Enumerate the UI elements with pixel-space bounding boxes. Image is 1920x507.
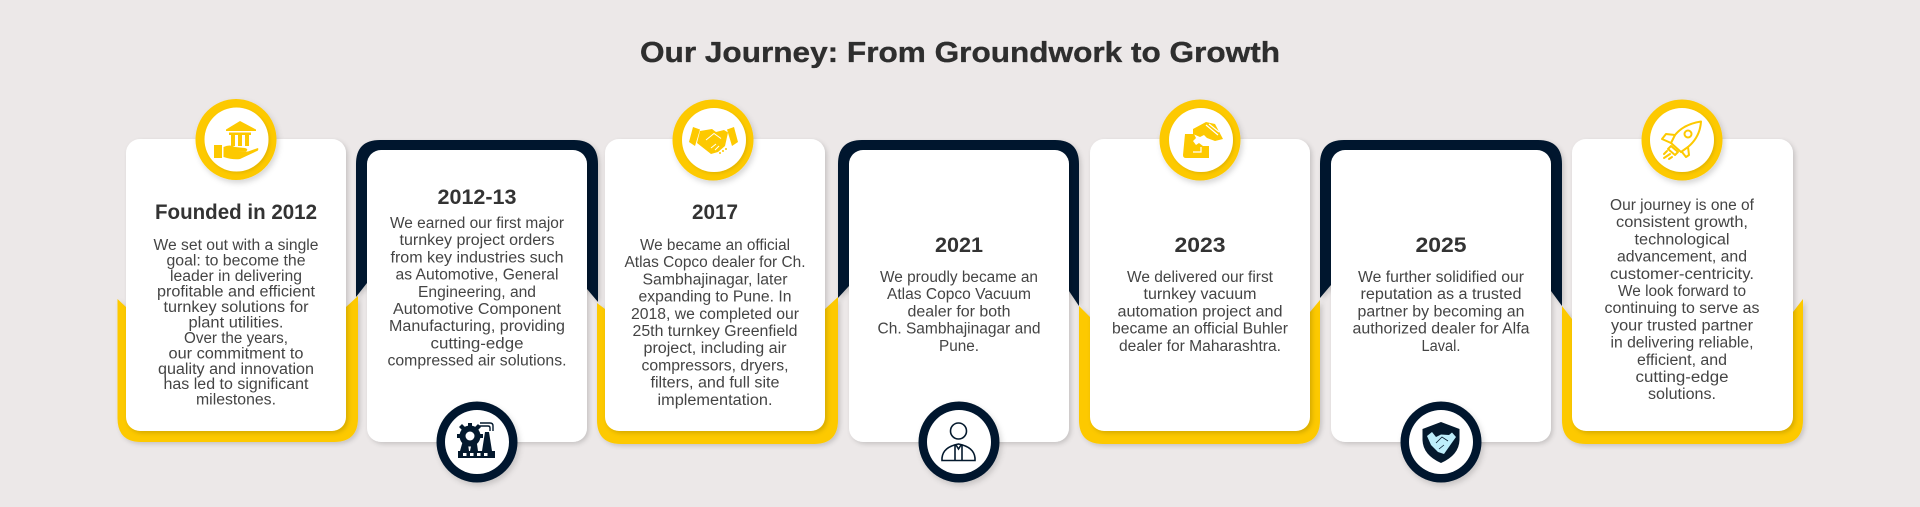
body text: efficient, and [1637,352,1727,369]
heading: 2023 [1174,234,1226,257]
body text: customer-centricity. [1610,266,1754,283]
body text [878,269,1040,355]
body text: has led to significant [164,376,309,393]
body text: We became an official [640,237,790,254]
body text: turnkey project orders [400,232,555,249]
body text: Automotive Component [393,301,562,318]
body text: quality and innovation [158,361,314,378]
icon: rocket [1642,100,1722,180]
body text: We earned our first major [390,215,564,232]
white card [1331,150,1551,442]
body text [154,237,318,409]
panel: 2021 [838,140,1079,482]
body text: dealer for Maharashtra. [1119,338,1281,355]
body text: compressed air solutions. [388,353,566,370]
body text: from key industries such [390,249,564,266]
white card [126,139,346,431]
yellow backing frame [597,297,838,444]
body text: Sambhajinagar, later [642,271,788,288]
body text: your trusted partner [1611,317,1753,334]
body text: Atlas Copco dealer for Ch. [624,254,806,271]
body text: became an official Buhler [1112,321,1288,338]
icon: factory with gear [436,402,518,482]
body text: our commitment to [168,345,304,362]
body text: dealer for both [908,303,1010,320]
body text [1112,269,1288,355]
heading: 2017 [692,201,738,224]
body text: cutting-edge [430,335,524,352]
panel: closing statement [1562,100,1803,444]
body text: goal: to become the [166,252,306,270]
body text: expanding to Pune. In [638,289,792,306]
body text: We further solidified our [1358,269,1524,286]
body text: technological [1634,231,1730,248]
body text: turnkey vacuum [1144,286,1256,303]
body text: Our journey is one of [1610,197,1755,214]
body text: automation project and [1118,303,1282,320]
body text: profitable and efficient [157,283,316,300]
heading: 2025 [1416,234,1467,257]
white card [849,150,1069,442]
icon: businessperson [918,402,1000,482]
body text: advancement, and [1617,249,1747,266]
body text: solutions. [1648,386,1716,403]
body text: plant utilities. [188,314,284,331]
body text: continuing to serve as [1604,300,1760,317]
body text: Ch. Sambhajinagar and [878,321,1040,338]
heading: 2021 [935,234,983,257]
body text: 2018, we completed our [631,306,799,323]
icon: shield with handshake [1400,402,1482,482]
white card [367,150,587,442]
body text: compressors, dryers, [642,357,788,374]
white card [1572,139,1793,431]
body text [1604,197,1760,403]
body text: as Automotive, General [396,267,558,284]
body text: We set out with a single [154,237,318,254]
body text [624,237,806,409]
yellow backing frame [1079,300,1320,444]
white card [605,139,825,431]
body text: Atlas Copco Vacuum [887,286,1031,303]
body text: filters, and full site [650,375,780,392]
body text: Pune. [939,338,979,355]
icon: handshake [672,100,754,180]
body text: implementation. [658,392,772,409]
body text: Over the years, [184,330,288,347]
body text: Laval. [1422,338,1460,355]
body text: authorized dealer for Alfa [1352,321,1530,338]
body text: We delivered our first [1127,269,1274,286]
navy backing frame [838,140,1079,306]
body text [388,215,566,370]
icon: bank in hand [196,99,276,180]
body text: partner by becoming an [1358,303,1524,320]
body text: We proudly became an [880,269,1038,286]
body text: leader in delivering [170,268,302,285]
body text [1352,269,1530,355]
icon: puzzle and hand [1160,100,1240,180]
body text: Manufacturing, providing [389,318,565,335]
body text: project, including air [644,340,786,357]
panel: Founded in 2012 [118,99,358,442]
body text: 25th turnkey Greenfield [632,323,798,340]
title: Our Journey: From Groundwork to Growth [640,37,1280,69]
navy backing frame [356,140,598,302]
navy backing frame [1320,140,1562,306]
body text: reputation as a trusted [1360,286,1522,303]
yellow backing frame [1562,299,1803,444]
body text: in delivering reliable, [1610,335,1754,352]
body text: consistent growth, [1616,214,1748,231]
body text: cutting-edge [1636,369,1728,386]
body text: milestones. [196,392,276,409]
panel: 2025 [1320,140,1562,482]
panel: 2017 [597,100,838,444]
panel: 2012-13 [356,140,598,482]
heading: 2012-13 [438,186,516,209]
panel: 2023 [1079,100,1320,444]
heading: Founded in 2012 [155,201,317,224]
body text: turnkey solutions for [164,299,308,316]
white card [1090,139,1310,431]
yellow backing frame [118,296,358,442]
body text: Engineering, and [418,284,536,301]
body text: We look forward to [1618,283,1746,300]
